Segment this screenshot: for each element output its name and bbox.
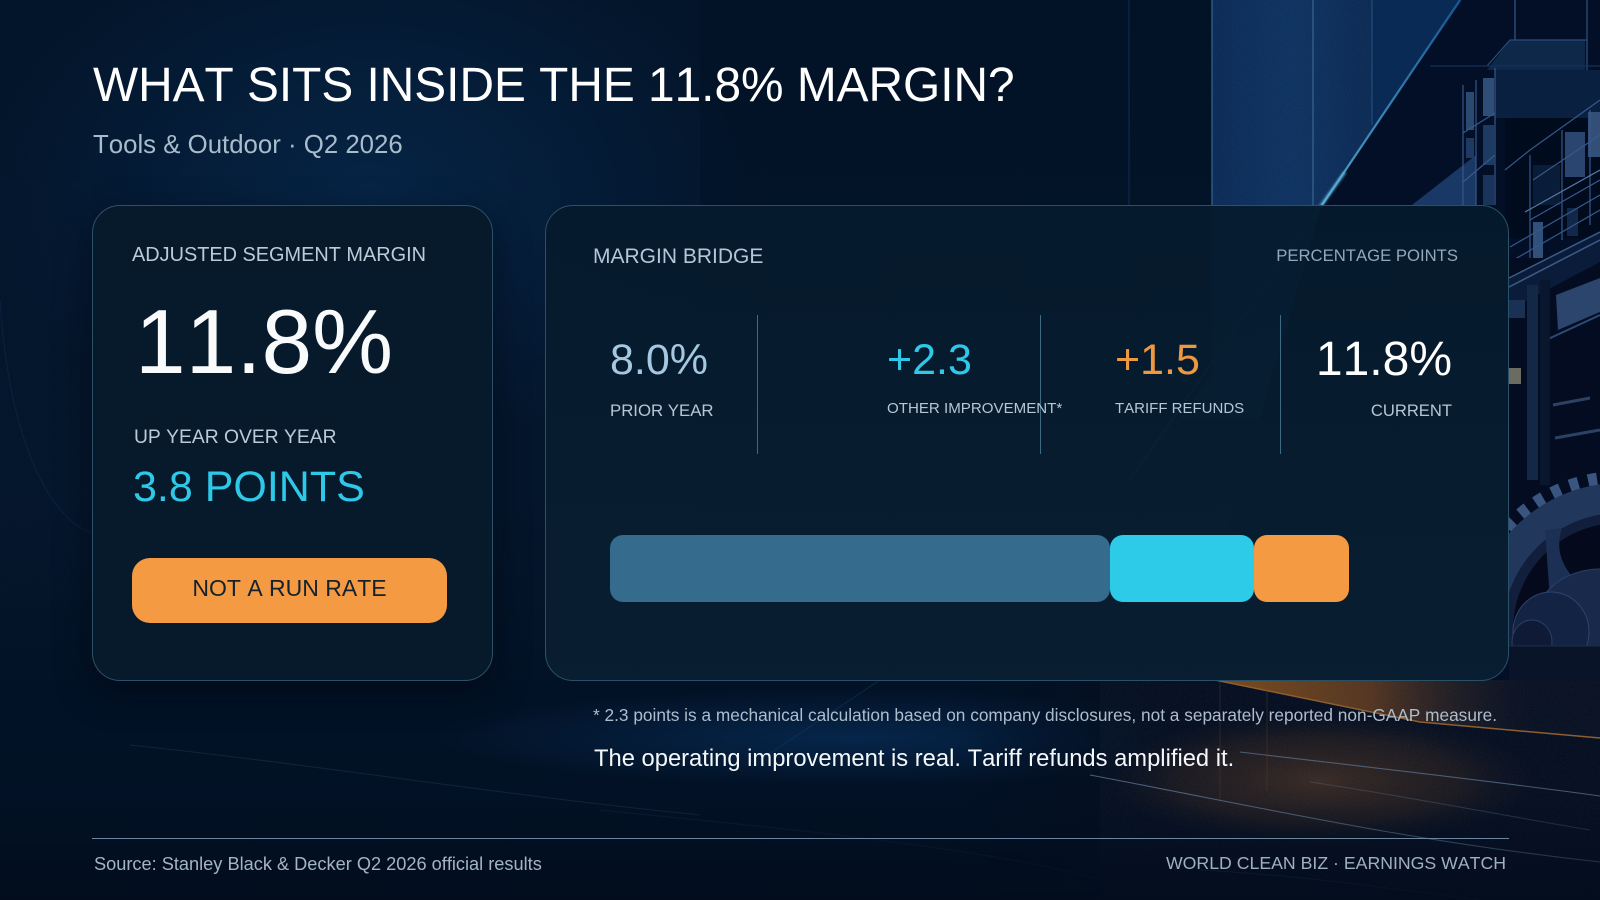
- metric: prior year: [610, 336, 714, 420]
- panel: adjusted segment margin: [92, 205, 493, 681]
- floor: [0, 680, 1100, 900]
- footer rule: [92, 838, 1509, 839]
- footnote: * 2.3 points is a mechanical calculation based on company disclosures, not a separately reported non-GAAP measure.: [593, 705, 1497, 725]
- gear: [1509, 472, 1600, 646]
- blue steel wall: [1180, 0, 1462, 420]
- wall lines: [1129, 0, 1372, 205]
- label: CURRENT: [1371, 400, 1452, 420]
- subtitle: Tools & Outdoor · Q2 2026: [93, 131, 403, 159]
- streak: [1322, 0, 1460, 205]
- brand: WORLD CLEAN BIZ · EARNINGS WATCH: [1166, 853, 1506, 873]
- dark band behind the title's right side: [700, 0, 1212, 640]
- label: OTHER IMPROVEMENT*: [887, 400, 1062, 417]
- bar: tariff refunds: [1254, 535, 1349, 602]
- units note: PERCENTAGE POINTS: [1276, 246, 1458, 265]
- heading: MARGIN BRIDGE: [593, 245, 763, 268]
- metric: tariff refunds: [1115, 336, 1244, 417]
- big value: 11.8%: [135, 292, 393, 393]
- callout: not a run rate: NOT A RUN RATE: [192, 575, 387, 601]
- panel: margin bridge: [545, 205, 1509, 681]
- label: PRIOR YEAR: [610, 400, 714, 420]
- dark building mass: [1180, 0, 1600, 690]
- column divider 2: [1040, 315, 1041, 454]
- source: Source: Stanley Black & Decker Q2 2026 official results: [94, 854, 542, 874]
- value: +1.5: [1115, 336, 1200, 384]
- value: 11.8%: [1316, 333, 1452, 386]
- label: adjusted segment margin: ADJUSTED SEGMENT MARGIN: [132, 244, 426, 266]
- metric: other improvement: [887, 336, 1062, 417]
- column divider 3: [1280, 315, 1281, 454]
- label: up year over year: UP YEAR OVER YEAR: [134, 427, 337, 448]
- title: WHAT SITS INSIDE THE 11.8% MARGIN?: [93, 59, 1015, 112]
- right column below the card corner: [1509, 258, 1600, 648]
- metric: current: [1316, 333, 1452, 420]
- value: +2.3: [887, 336, 972, 384]
- column divider 1: [757, 315, 758, 454]
- label: TARIFF REFUNDS: [1115, 400, 1244, 417]
- value: points: 3.8 POINTS: [133, 463, 365, 511]
- takeaway: The operating improvement is real. Tariff refunds amplified it.: [594, 745, 1234, 772]
- value: 8.0%: [610, 336, 708, 384]
- bar: prior year: [610, 535, 1110, 602]
- callout: not a run rate: [132, 558, 447, 623]
- building structure: [1412, 0, 1600, 264]
- bar: other improvement: [1110, 535, 1254, 602]
